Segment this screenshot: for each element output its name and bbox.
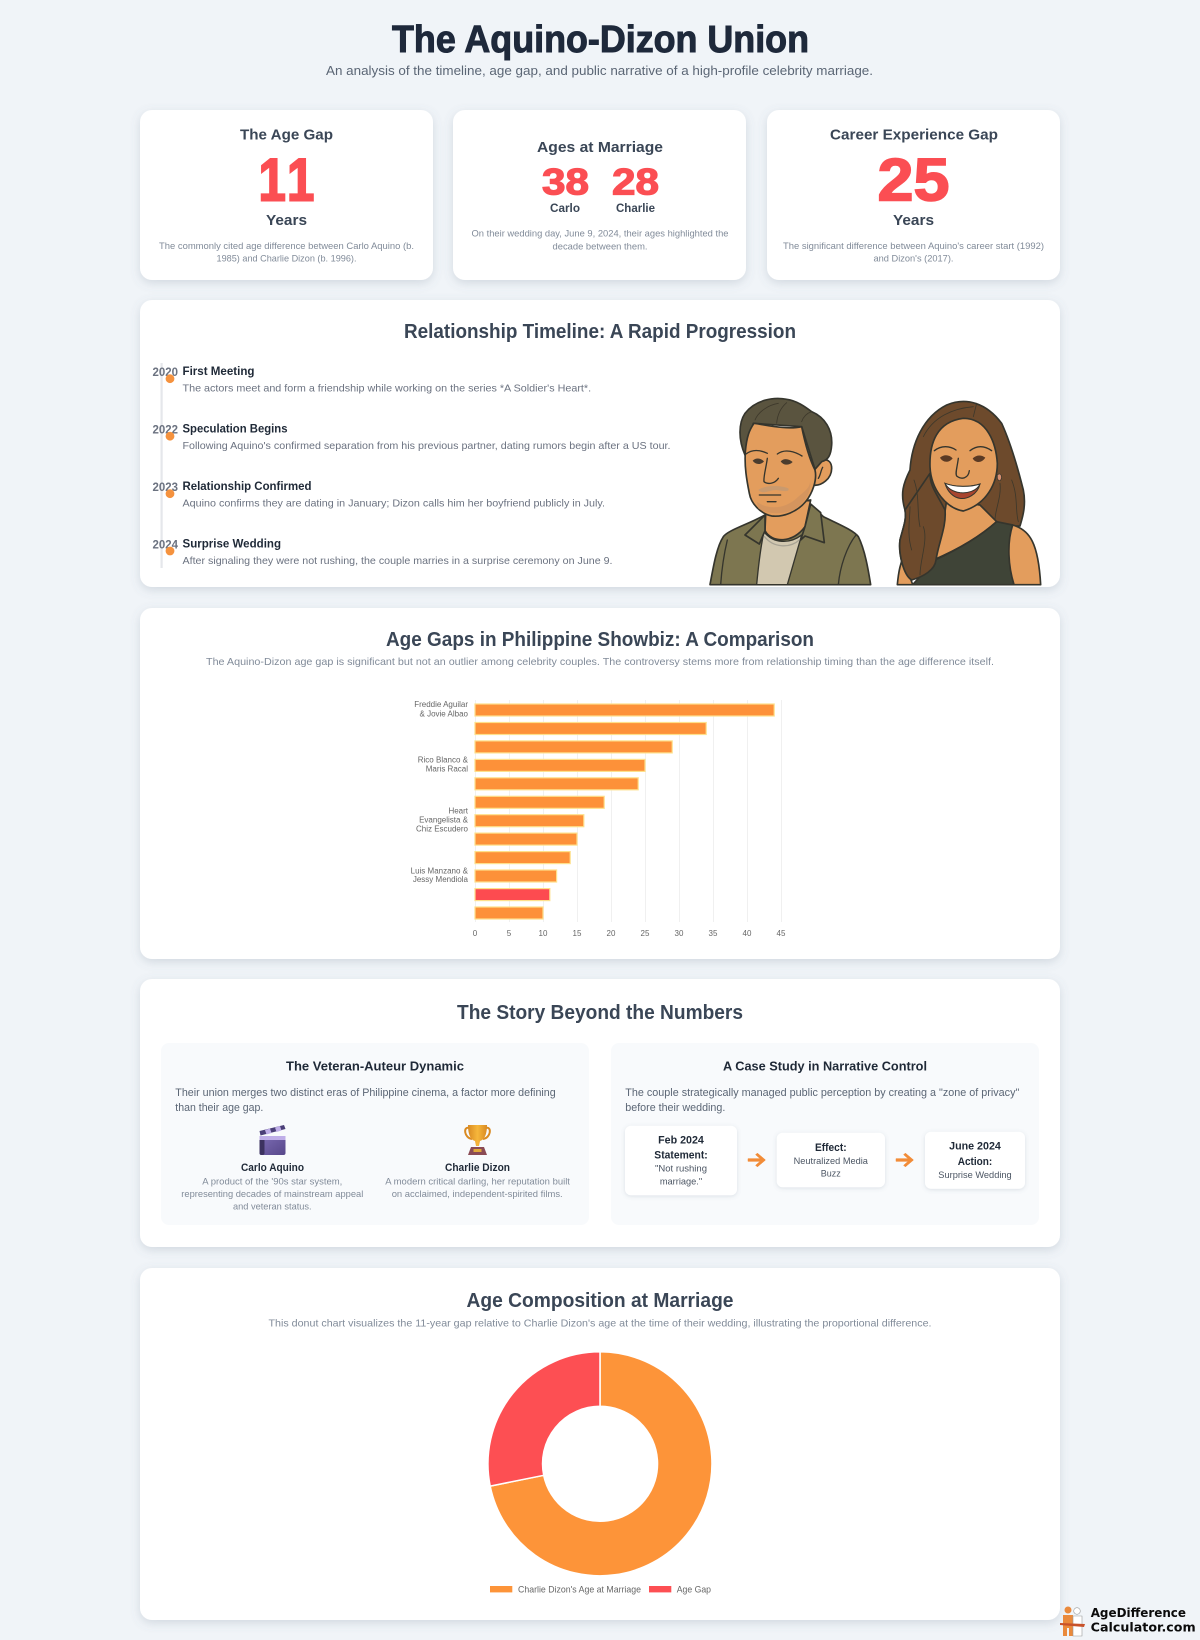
description: The significant difference between Aquino's career start (1992) bbox=[783, 241, 1044, 252]
big number 25: 25 bbox=[878, 146, 950, 214]
panel: age gap comparison bbox=[140, 608, 1060, 959]
description: and Dizon's (2017). bbox=[874, 254, 954, 265]
stat card: ages at marriage bbox=[453, 110, 746, 280]
timeline event 2022: Speculation Begins bbox=[182, 422, 288, 436]
donut chart bbox=[488, 1352, 712, 1576]
timeline event 2020: 2020 bbox=[152, 367, 178, 379]
description bbox=[159, 241, 414, 265]
timeline event 2023: 2023 bbox=[152, 482, 178, 494]
card heading: The Age Gap bbox=[240, 126, 333, 144]
sub-panel text: Their union merges two distinct eras of Philippine cinema, a factor more defining bbox=[175, 1087, 556, 1099]
header bbox=[326, 19, 873, 78]
person: Charlie Dizon: A modern critical darling, her reputation built bbox=[385, 1177, 570, 1188]
flow step: Feb 2024 statement bbox=[625, 1126, 737, 1195]
flow step: effect: Neutralized Media bbox=[794, 1156, 869, 1167]
card heading: Career Experience Gap bbox=[830, 126, 998, 144]
arrow bbox=[896, 1153, 914, 1167]
arrow bbox=[748, 1153, 766, 1167]
illustration: Charlie Dizon portrait bbox=[897, 401, 1041, 585]
timeline event 2022 bbox=[152, 422, 670, 452]
bar chart: 40 bbox=[743, 929, 752, 938]
description bbox=[472, 229, 728, 252]
bar chart: 30 bbox=[675, 929, 684, 938]
bar chart: 45 bbox=[777, 929, 786, 938]
stat card: the age gap bbox=[140, 110, 433, 280]
card heading: Ages at Marriage bbox=[537, 139, 663, 156]
flow step: Feb 2024 statement: marriage." bbox=[660, 1176, 702, 1187]
intro text: This donut chart visualizes the 11-year gap relative to Charlie Dizon's age at the time of their wedding, illustrating the proportional difference. bbox=[268, 1318, 932, 1330]
bar chart: 35 bbox=[709, 929, 718, 938]
legend bbox=[490, 1584, 711, 1595]
flow step: effect: Buzz bbox=[821, 1169, 841, 1180]
timeline event 2020: The actors meet and form a friendship while working on the series *A Soldier's Heart*. bbox=[182, 382, 591, 394]
heading: Age Composition at Marriage bbox=[466, 1290, 734, 1312]
bar chart: 25 bbox=[641, 929, 650, 938]
flow step: June 2024 action: Action: bbox=[958, 1156, 992, 1168]
unit: Years bbox=[893, 212, 934, 229]
sub-panel heading: A Case Study in Narrative Control bbox=[723, 1059, 927, 1074]
timeline event 2022: Following Aquino's confirmed separation from his previous partner, dating rumors begin after a US tour. bbox=[182, 440, 670, 452]
sub-panel text bbox=[625, 1087, 1019, 1114]
bar chart: 0 bbox=[473, 929, 478, 938]
bar chart: Rico Blanco & bbox=[418, 756, 469, 765]
sub-panel: narrative control bbox=[611, 1043, 1039, 1225]
legend: Age Gap bbox=[677, 1584, 711, 1595]
panel: the story beyond the numbers bbox=[140, 979, 1060, 1247]
timeline event 2024: 2024 bbox=[152, 540, 179, 552]
big number 11: 11 bbox=[259, 146, 314, 214]
sub-panel: veteran-auteur dynamic bbox=[161, 1043, 589, 1225]
flow step: effect: Effect: bbox=[815, 1142, 847, 1154]
legend: Charlie Dizon's Age at Marriage bbox=[518, 1584, 641, 1595]
sub-panel heading: The Veteran-Auteur Dynamic bbox=[286, 1059, 464, 1074]
logo: AgeDifference Calculator.com: Calculator.com bbox=[1091, 1620, 1196, 1635]
flow step: Feb 2024 statement: Statement: bbox=[654, 1150, 708, 1162]
Charlie age: 28 bbox=[612, 162, 659, 202]
flow step: Feb 2024 statement: "Not rushing bbox=[655, 1164, 707, 1175]
icon: two people bbox=[1060, 1606, 1085, 1636]
Charlie age bbox=[612, 162, 659, 215]
panel: relationship timeline bbox=[140, 300, 1060, 587]
flow step: June 2024 action: Surprise Wedding bbox=[938, 1170, 1012, 1181]
bar chart: Chiz Escudero bbox=[416, 824, 469, 833]
subtitle: An analysis of the timeline, age gap, and public narrative of a high-profile celebrity marriage. bbox=[326, 63, 873, 78]
heading: The Story Beyond the Numbers bbox=[457, 1002, 743, 1024]
intro text: The Aquino-Dizon age gap is significant but not an outlier among celebrity couples. The controversy stems more from relationship timing than the age difference itself. bbox=[206, 656, 994, 668]
person: Carlo Aquino: Carlo Aquino bbox=[241, 1162, 304, 1174]
timeline event 2024: After signaling they were not rushing, the couple marries in a surprise ceremony on June 9. bbox=[182, 555, 612, 567]
flow step: June 2024 action bbox=[925, 1132, 1025, 1189]
description bbox=[783, 241, 1044, 265]
bar chart: Luis Manzano & bbox=[411, 866, 469, 875]
stat card: career experience gap bbox=[767, 110, 1060, 280]
flow step: Feb 2024 statement: Feb 2024 bbox=[658, 1134, 705, 1146]
timeline event 2020: First Meeting bbox=[182, 364, 254, 378]
person: Carlo Aquino: and veteran status. bbox=[233, 1202, 312, 1213]
person: Carlo Aquino: A product of the '90s star system, bbox=[202, 1177, 342, 1188]
timeline event 2023: Aquino confirms they are dating in January; Dizon calls him her boyfriend publicly in July. bbox=[182, 498, 605, 510]
person: Charlie Dizon bbox=[385, 1162, 570, 1200]
logo: AgeDifference Calculator.com bbox=[1060, 1605, 1196, 1636]
timeline event 2024 bbox=[152, 536, 612, 567]
timeline event 2023: Relationship Confirmed bbox=[182, 479, 312, 493]
sub-panel text: The couple strategically managed public perception by creating a "zone of privacy" bbox=[625, 1087, 1019, 1099]
bar chart: & Jovie Albao bbox=[420, 709, 469, 718]
Carlo age bbox=[542, 162, 589, 215]
timeline event 2022: 2022 bbox=[152, 424, 178, 436]
description: decade between them. bbox=[552, 241, 648, 252]
Charlie age: Charlie bbox=[616, 201, 655, 215]
timeline event 2024: Surprise Wedding bbox=[182, 536, 281, 550]
bar chart: Maris Racal bbox=[426, 764, 468, 774]
bar chart: Evangelista & bbox=[419, 815, 469, 824]
heading: Relationship Timeline: A Rapid Progression bbox=[404, 321, 796, 343]
person: Carlo Aquino bbox=[181, 1162, 363, 1213]
icon: trophy bbox=[465, 1125, 490, 1155]
flow step: June 2024 action: June 2024 bbox=[949, 1141, 1002, 1153]
bar chart bbox=[411, 700, 786, 938]
flow step: effect bbox=[777, 1133, 885, 1187]
Carlo age: 38 bbox=[542, 162, 589, 202]
unit: Years bbox=[266, 212, 307, 229]
logo: AgeDifference Calculator.com: AgeDifference bbox=[1091, 1605, 1186, 1620]
sub-panel text bbox=[175, 1087, 556, 1114]
bar chart: Jessy Mendiola bbox=[413, 875, 469, 884]
person: Charlie Dizon: on acclaimed, independent-spirited films. bbox=[392, 1189, 563, 1200]
icon: clapperboard bbox=[260, 1125, 286, 1155]
bar chart: Heart bbox=[448, 806, 469, 815]
description: The commonly cited age difference between Carlo Aquino (b. bbox=[159, 241, 414, 252]
sub-panel text: than their age gap. bbox=[175, 1102, 263, 1114]
bar chart: Freddie Aguilar bbox=[414, 700, 468, 709]
description: On their wedding day, June 9, 2024, their ages highlighted the bbox=[472, 229, 728, 240]
person: Charlie Dizon: Charlie Dizon bbox=[445, 1162, 510, 1174]
illustration: Carlo Aquino portrait bbox=[710, 398, 871, 585]
timeline event 2023 bbox=[152, 479, 605, 510]
bar chart: 5 bbox=[507, 929, 512, 938]
title: The Aquino-Dizon Union bbox=[392, 19, 809, 61]
Carlo age: Carlo bbox=[550, 201, 580, 215]
bar chart: 20 bbox=[607, 929, 616, 938]
bar chart: 10 bbox=[539, 929, 548, 938]
panel: age composition bbox=[140, 1268, 1060, 1620]
description: 1985) and Charlie Dizon (b. 1996). bbox=[216, 254, 356, 265]
bar chart: 15 bbox=[573, 929, 582, 938]
sub-panel text: before their wedding. bbox=[625, 1102, 725, 1114]
heading: Age Gaps in Philippine Showbiz: A Comparison bbox=[386, 629, 814, 651]
timeline event 2020 bbox=[152, 364, 591, 394]
person: Carlo Aquino: representing decades of mainstream appeal bbox=[181, 1189, 363, 1200]
